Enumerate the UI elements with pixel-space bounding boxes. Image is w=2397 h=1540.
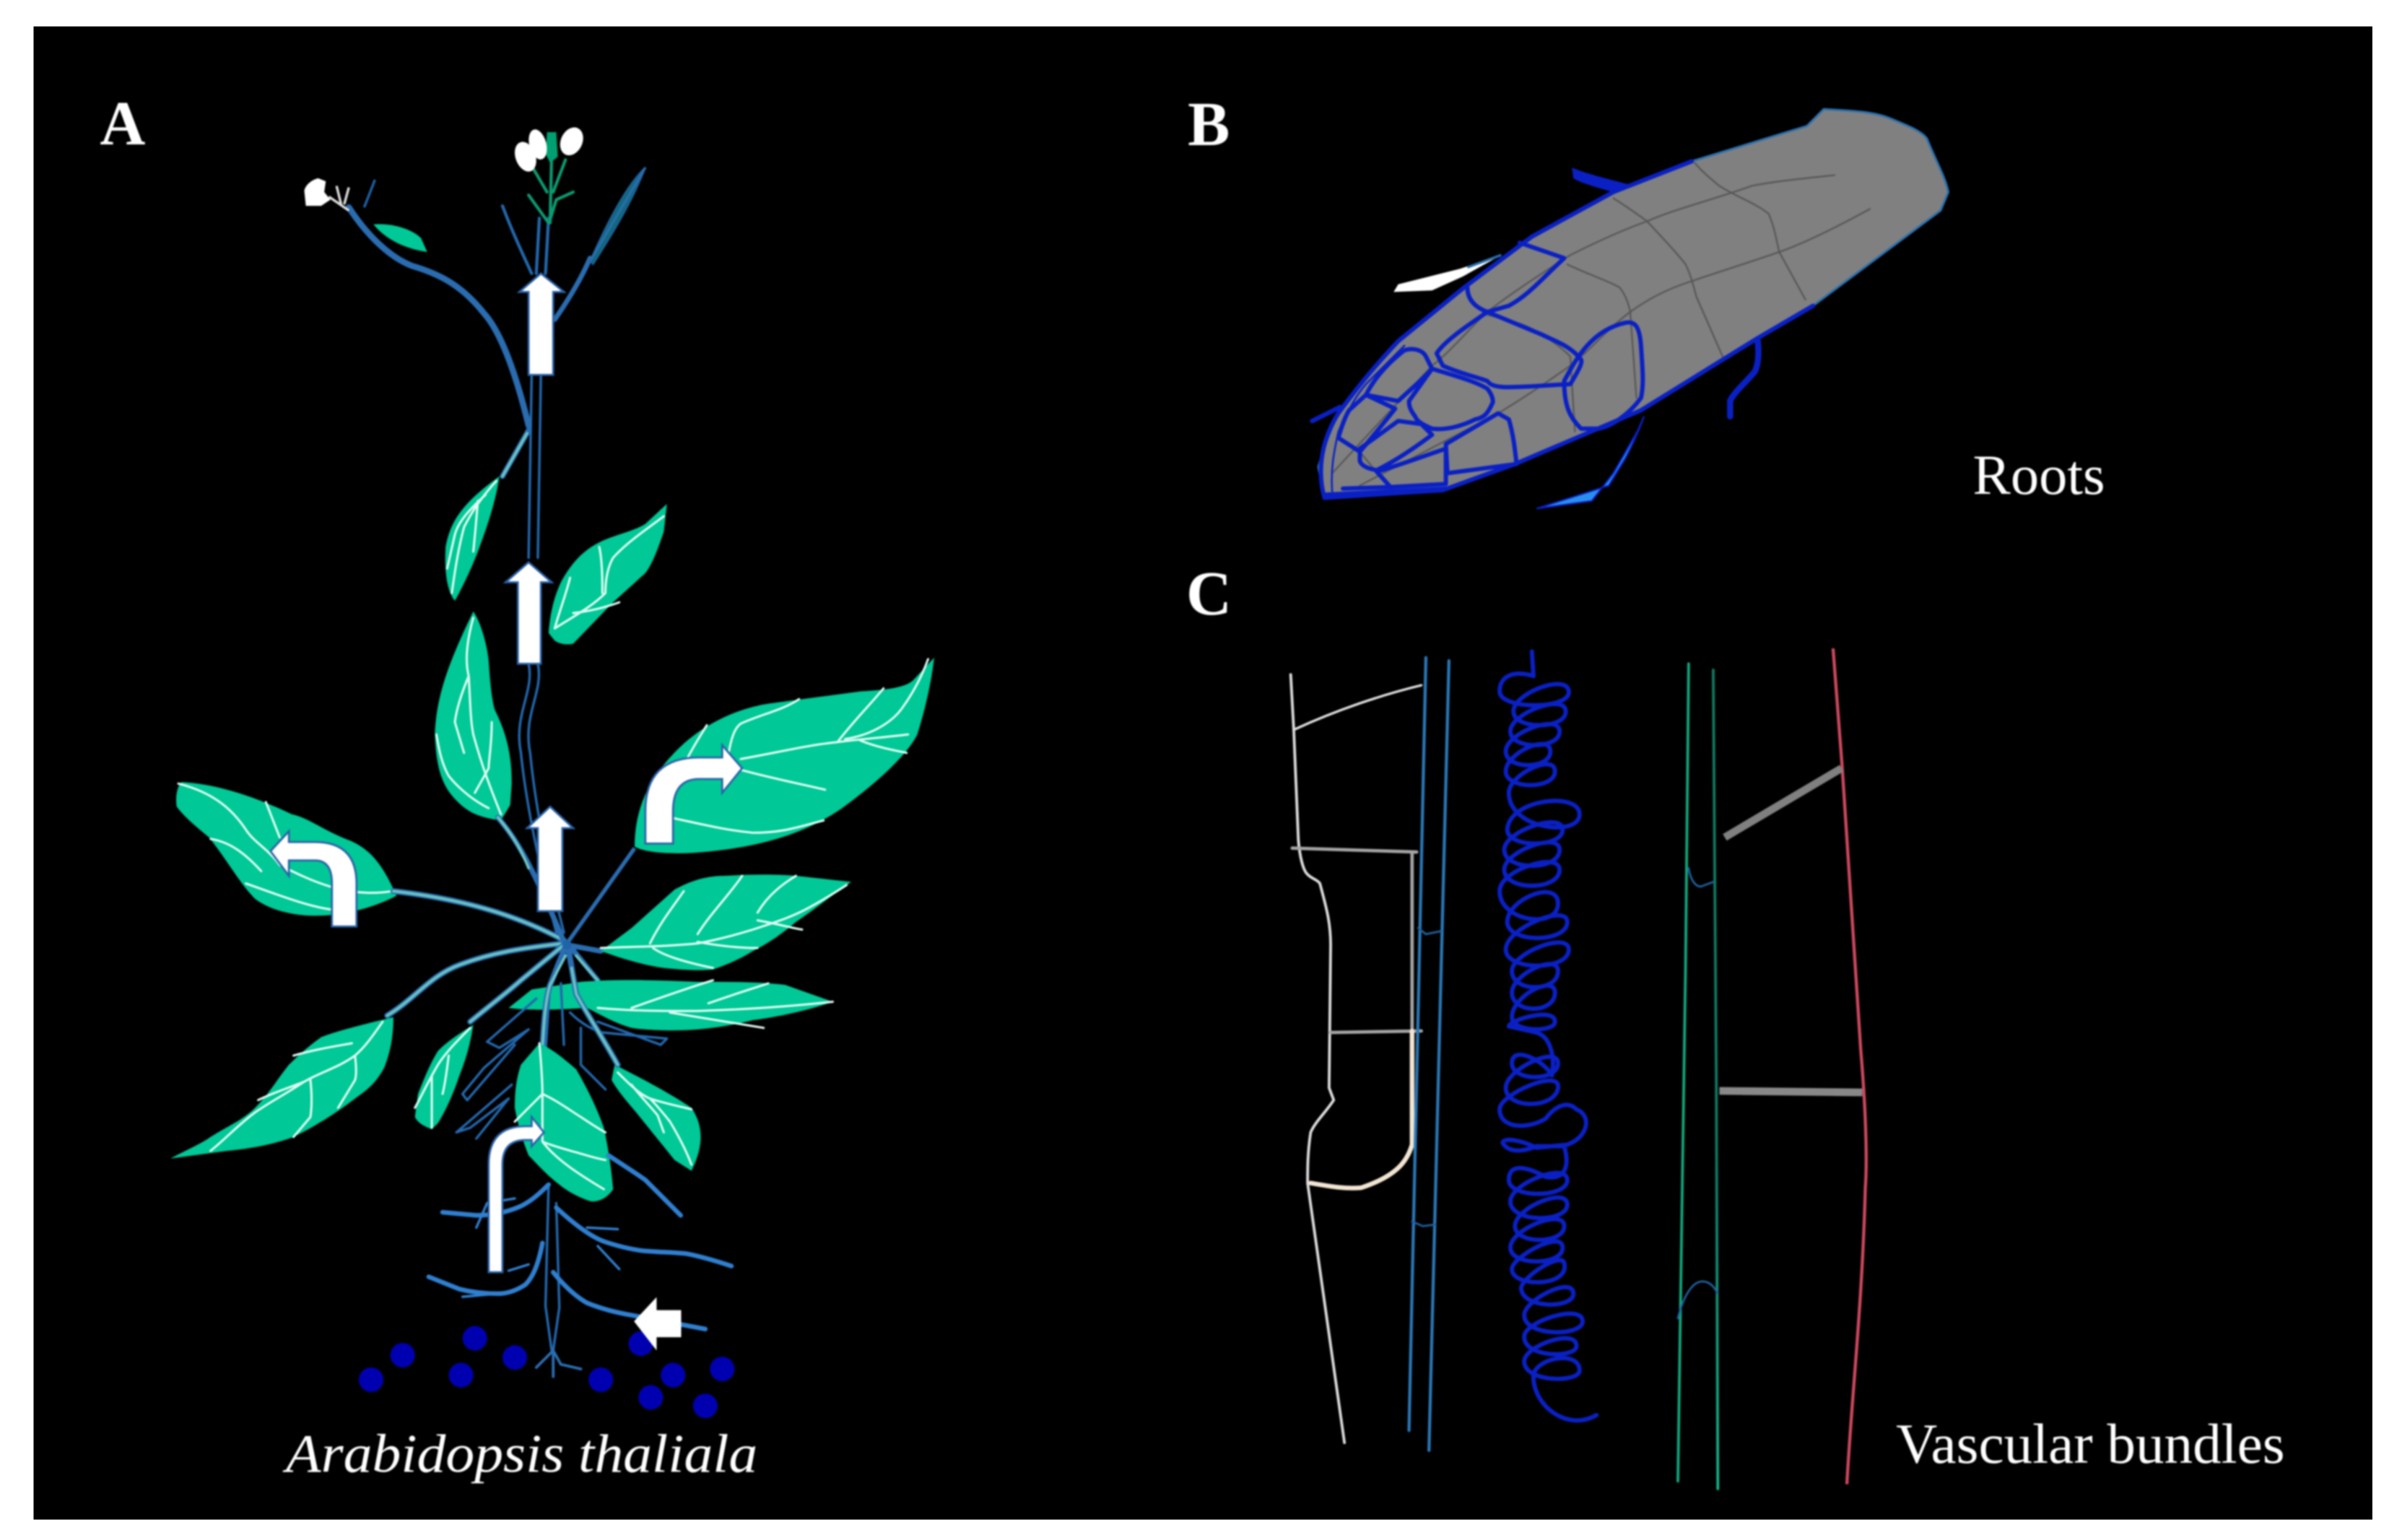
Roots label: Roots — [1973, 444, 2105, 507]
leaf: small upper left — [445, 477, 500, 601]
arrow: up, top stem — [519, 274, 564, 375]
Vascular bundles label: Vascular bundles — [1896, 1413, 2285, 1475]
inflorescence stems — [349, 168, 645, 933]
panel C: vascular bundles — [1186, 558, 2285, 1489]
heading A: A — [100, 88, 145, 158]
stems to lower leaves — [542, 947, 618, 1065]
panel A: Arabidopsis plant — [100, 88, 934, 1484]
leaf: small lower left — [415, 1025, 474, 1129]
lateral roots — [429, 1155, 731, 1329]
teal seed pod on side branch — [373, 224, 427, 252]
arrow: up, rosette — [527, 806, 573, 911]
white vessel outline — [1291, 674, 1422, 1443]
blue root outline and cells — [1321, 161, 1813, 498]
root protrusions — [1312, 168, 1758, 508]
blue parallel vessel — [1409, 658, 1449, 1450]
root body — [1318, 109, 1949, 498]
leaf: big upper right — [635, 658, 934, 853]
blue coiled vessel — [1500, 651, 1596, 1420]
arrow: small left at root tip — [635, 1298, 681, 1349]
arrow: bent right into big leaf — [645, 745, 742, 843]
internal cell lines — [1332, 163, 1870, 485]
leaf: centre lower — [515, 1043, 613, 1201]
arrow: up, mid stem — [505, 562, 552, 664]
heading C: C — [1186, 558, 1232, 628]
stems from rosette centre — [387, 817, 635, 1022]
nutrient dots — [359, 1326, 734, 1418]
heading B: B — [1188, 89, 1230, 159]
red vessel with gray connectors — [1719, 648, 1866, 1484]
leaf: right large lower — [601, 874, 851, 970]
leaf: left with arrow — [176, 782, 396, 915]
thin roots behind lower leaf — [456, 983, 667, 1139]
leaf: right narrow lower — [508, 980, 833, 1030]
green vessel — [1678, 664, 1718, 1489]
flowers, main branch — [511, 123, 588, 223]
arrow: bent up from root — [489, 1117, 544, 1272]
leaf: small upper right — [549, 504, 667, 645]
flowers, side branch — [304, 178, 349, 211]
species caption: Arabidopsis thaliala — [282, 1424, 757, 1484]
leaf: small lower right — [612, 1065, 700, 1171]
panel B: root diagram — [1188, 89, 2105, 508]
arrow: bent left into leaf — [271, 831, 357, 926]
leaf: tall upper centre — [435, 612, 512, 820]
rosette centre — [562, 940, 572, 949]
leaf: lower left large — [170, 1017, 393, 1159]
main root — [536, 1185, 581, 1377]
